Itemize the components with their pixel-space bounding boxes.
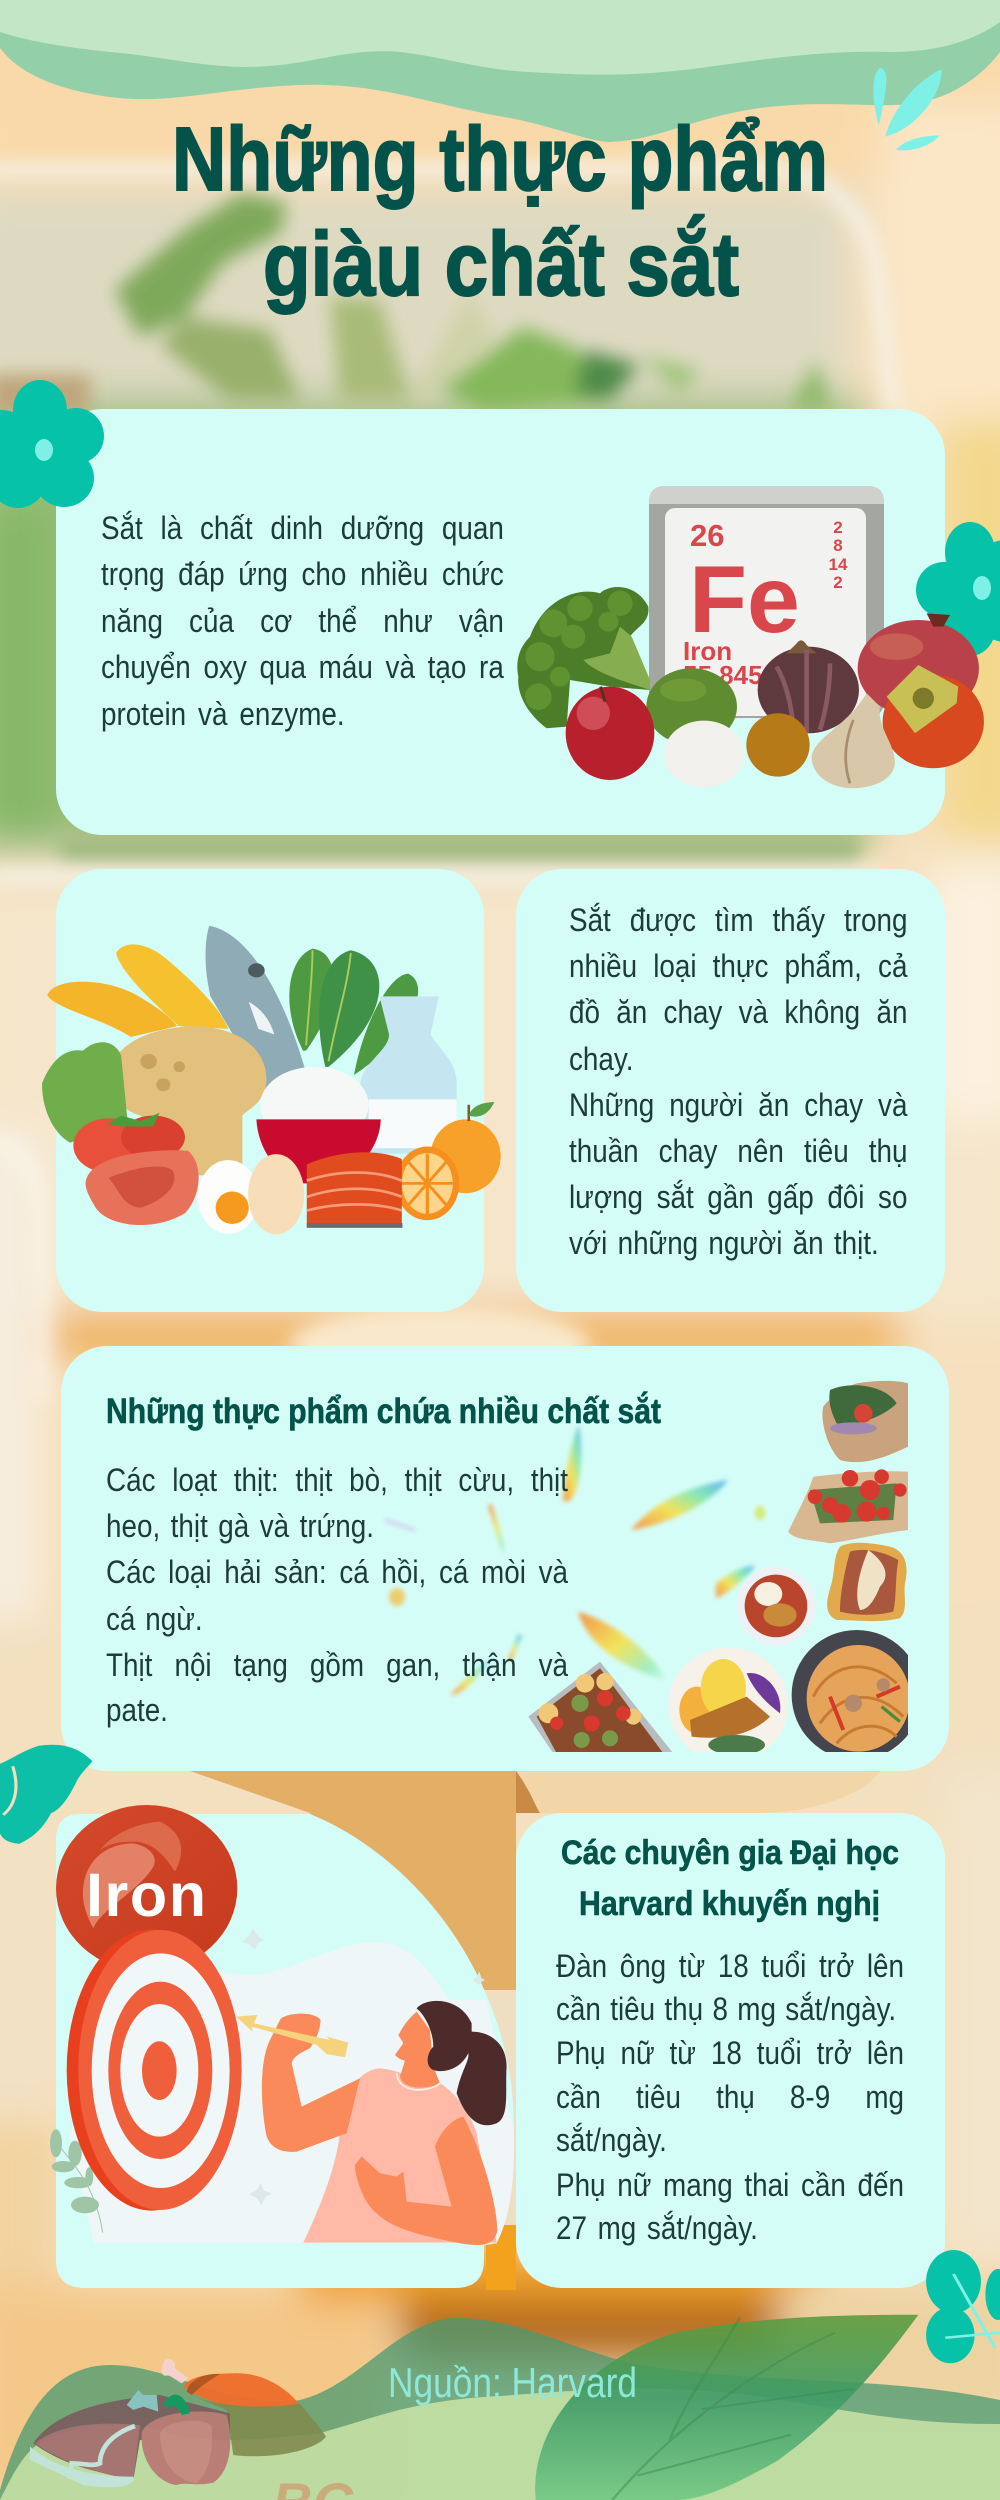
milk bottle bbox=[360, 996, 457, 1154]
element tile bbox=[649, 486, 884, 718]
meat bbox=[86, 1150, 199, 1225]
text: iron importance: chuyển oxy qua máu và tạo ra bbox=[101, 649, 504, 685]
lime bbox=[646, 668, 737, 745]
text: iron importance: trọng đáp ứng cho nhiều chức bbox=[101, 556, 504, 592]
iron label: Iron bbox=[86, 1861, 206, 1929]
lettuce bbox=[42, 1042, 128, 1143]
woman bbox=[262, 2001, 507, 2245]
element tile: 26 bbox=[690, 518, 724, 553]
element tile: Fe bbox=[689, 547, 800, 653]
illustration: assorted foods bbox=[42, 926, 501, 1234]
beef liver top bbox=[183, 2373, 303, 2410]
illustration: Fe element tile with iron-rich foods bbox=[517, 486, 984, 788]
illustration: prepared dishes bbox=[528, 1381, 922, 1762]
text: foods high in iron list: pate. bbox=[106, 1692, 168, 1728]
text: Harvard recommendations: 27 mg sắt/ngày. bbox=[556, 2210, 758, 2246]
title: Những thực phẩm bbox=[172, 110, 828, 210]
egg bbox=[248, 1154, 304, 1234]
element tile: 8 bbox=[833, 536, 843, 555]
text: Harvard recommendations: Đàn ông từ 18 tuổi trở lên bbox=[556, 1948, 904, 1984]
rice bowl bbox=[256, 1067, 381, 1183]
element tile: 2 bbox=[833, 518, 843, 537]
broccoli bbox=[517, 587, 650, 728]
target board bbox=[67, 1929, 242, 2211]
orange bbox=[431, 1102, 501, 1193]
tomato bbox=[73, 1113, 185, 1173]
apple bbox=[566, 687, 654, 780]
text: iron sources: thuần chay nên tiêu thụ bbox=[569, 1133, 907, 1169]
tan backdrop shape bbox=[190, 1771, 516, 1990]
element tile: 2 bbox=[833, 573, 843, 592]
title bbox=[172, 110, 828, 315]
panel: foods high in iron bbox=[61, 1346, 949, 1771]
dish: pasta bbox=[792, 1630, 908, 1752]
soft backdrop bbox=[70, 1942, 514, 2243]
rainbow streaks bbox=[385, 1425, 765, 1695]
panel: Harvard recommendations bbox=[516, 1813, 945, 2288]
text: Harvard recommendations: sắt/ngày. bbox=[556, 2122, 667, 2158]
bread bbox=[108, 1026, 267, 1175]
text: Harvard recommendations bbox=[556, 1948, 904, 2246]
text: iron importance bbox=[101, 510, 504, 732]
heading bbox=[561, 1834, 899, 1923]
icon: teal leaf bbox=[0, 1745, 92, 1844]
panel: intro bbox=[56, 409, 945, 835]
text: foods high in iron list: Thịt nội tạng gồm gan, thận và bbox=[106, 1647, 568, 1683]
top waves bbox=[0, 0, 1000, 142]
text: Harvard recommendations: cần tiêu thụ 8-9 mg bbox=[556, 2079, 904, 2115]
text: foods high in iron list bbox=[106, 1462, 568, 1728]
pomegranate bbox=[858, 613, 979, 717]
bananas bbox=[47, 944, 228, 1037]
text: foods high in iron list: heo, thịt gà và trứng. bbox=[106, 1508, 374, 1544]
heading: Các chuyên gia Đại học bbox=[561, 1834, 899, 1872]
heading: Những thực phẩm chứa nhiều chất sắt bbox=[106, 1391, 661, 1431]
icon: cyan splash bbox=[873, 68, 942, 150]
text: iron sources: lượng sắt gần gấp đôi so bbox=[569, 1179, 907, 1215]
icon: teal branch bbox=[926, 2250, 1000, 2363]
egg bbox=[664, 721, 744, 787]
text: iron importance: năng của cơ thể như vận bbox=[101, 603, 504, 639]
element tile: 14 bbox=[829, 555, 848, 574]
text: Harvard recommendations: Phụ nữ mang thai cần đến bbox=[556, 2167, 904, 2203]
dish: stuffed pepper bbox=[827, 1543, 907, 1621]
dish: tray bbox=[528, 1662, 673, 1753]
bone bbox=[162, 2359, 188, 2383]
fish bbox=[206, 926, 307, 1105]
fig bbox=[758, 640, 859, 733]
text: iron importance: Sắt là chất dinh dưỡng quan bbox=[101, 510, 504, 546]
persimmon bbox=[883, 665, 984, 768]
text: iron sources: Những người ăn chay và bbox=[569, 1087, 907, 1123]
text: foods high in iron list: Các loạt thịt: thịt bò, thịt cừu, thịt bbox=[106, 1462, 568, 1498]
text: foods high in iron list: Các loại hải sản: cá hồi, cá mòi và bbox=[106, 1554, 568, 1590]
text: iron sources: chay. bbox=[569, 1041, 633, 1077]
text: iron sources: Sắt được tìm thấy trong bbox=[569, 902, 907, 938]
panel: target illustration bbox=[50, 1805, 514, 2288]
illustration: liver and pepper bbox=[30, 2359, 326, 2487]
text: iron sources bbox=[569, 902, 908, 1261]
icon: flower right bbox=[916, 522, 1000, 656]
liver lower bbox=[187, 2393, 326, 2456]
big leaf bbox=[535, 2315, 918, 2500]
element tile: Iron bbox=[683, 636, 732, 666]
text: iron sources: nhiều loại thực phẩm, cả bbox=[569, 948, 907, 984]
source: Nguồn: Harvard bbox=[388, 2359, 637, 2406]
text: Harvard recommendations: cần tiêu thụ 8 mg sắt/ngày. bbox=[556, 1991, 896, 2027]
text: Harvard recommendations: Phụ nữ từ 18 tuổi trở lên bbox=[556, 2035, 904, 2071]
text: foods high in iron list: cá ngừ. bbox=[106, 1601, 203, 1637]
dish: soup bowl bbox=[737, 1567, 815, 1645]
element tile: 55.845 bbox=[683, 660, 763, 690]
dish: cutlet plate bbox=[668, 1648, 788, 1762]
dish: tomato bread bbox=[788, 1469, 908, 1543]
text: iron sources: đồ ăn chay và không ăn bbox=[569, 994, 907, 1030]
spinach bbox=[289, 949, 418, 1075]
dish: wrap bbox=[822, 1381, 908, 1462]
small fruit bbox=[746, 713, 810, 777]
text: iron importance: protein và enzyme. bbox=[101, 696, 345, 732]
dart bbox=[236, 2015, 348, 2057]
bell pepper bbox=[142, 2395, 230, 2485]
panel: iron sources bbox=[516, 869, 945, 1312]
title: giàu chất sắt bbox=[263, 214, 739, 315]
egg halved bbox=[198, 1160, 259, 1234]
text: iron sources: với những người ăn thịt. bbox=[569, 1225, 879, 1261]
garlic bbox=[812, 693, 895, 788]
panel: food illustration bbox=[42, 869, 501, 1312]
iron ball bbox=[56, 1805, 237, 1972]
salmon bbox=[307, 1152, 402, 1228]
icon: flower left bbox=[0, 380, 104, 508]
bottom waves bbox=[0, 2318, 1000, 2500]
eucalyptus sprig bbox=[50, 2129, 103, 2233]
heading: Harvard khuyến nghị bbox=[579, 1885, 880, 1923]
orange slice bbox=[395, 1147, 459, 1220]
